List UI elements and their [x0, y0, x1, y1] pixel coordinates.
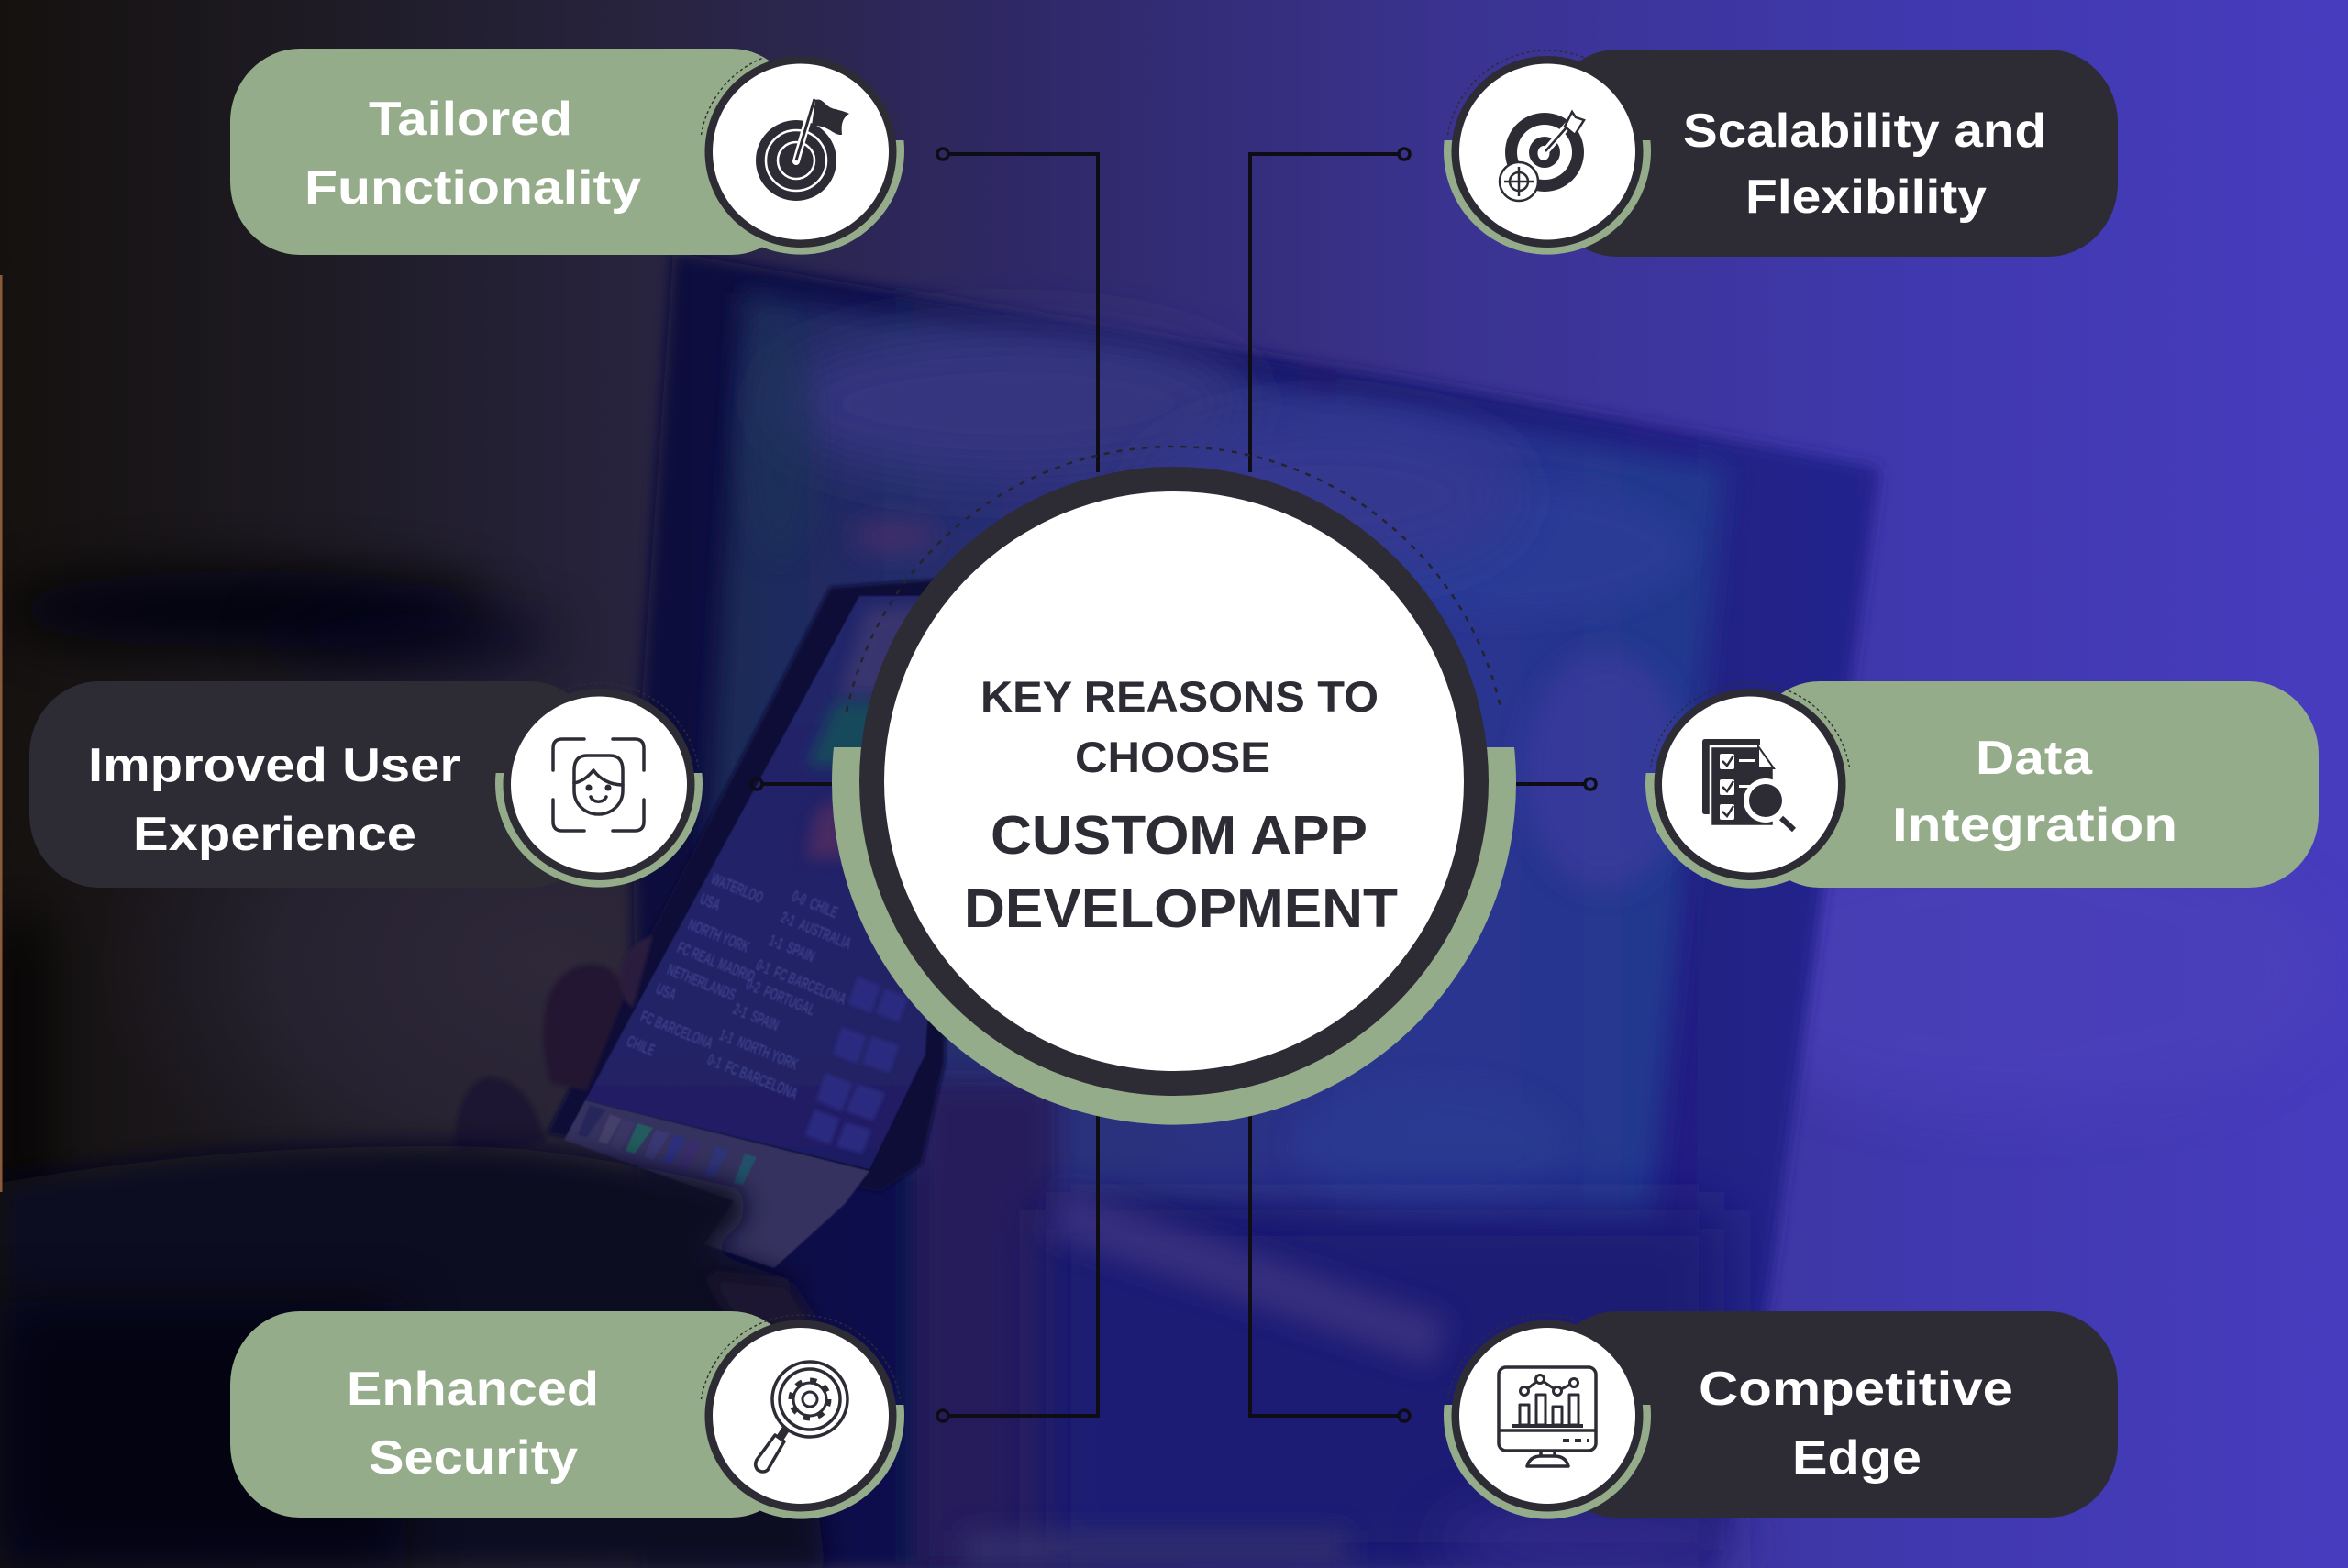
phone in hand: USA [653, 980, 679, 1005]
hub title: KEY REASONS TO [980, 672, 1379, 721]
label: Integration [1892, 799, 2177, 852]
panel: Data Integration [1645, 681, 2319, 889]
label [1699, 1363, 2013, 1485]
green half ring [1645, 773, 1855, 889]
green half ring [697, 140, 904, 255]
pill [1750, 681, 2319, 888]
phone in hand: NORTH YORK [685, 916, 752, 957]
dashed arc [499, 683, 699, 767]
phone in hand: 0-1 FC BARCELONA [753, 956, 848, 1010]
green half ring [1444, 140, 1651, 255]
icon badge [1451, 56, 1644, 248]
hub title: DEVELOPMENT [964, 878, 1398, 939]
label: Edge [1792, 1431, 1922, 1485]
panel: Scalability and Flexibility [1444, 50, 2118, 257]
icon badge [1451, 1320, 1644, 1511]
label: Functionality [305, 161, 641, 215]
label: Tailored [369, 93, 572, 146]
green half ring [1444, 1405, 1651, 1519]
phone in hand: WATERLOO [708, 870, 766, 908]
phone in hand: 0-0 CHILE [789, 888, 840, 922]
icon: magnifier with gear [756, 1362, 847, 1472]
hub dashed arc [847, 447, 1501, 712]
label [347, 1363, 599, 1485]
phone in hand [0, 578, 958, 1568]
phone in hand: NETHERLANDS [664, 961, 738, 1005]
dashed arc [1447, 50, 1647, 135]
icon: monitor with chart [1499, 1367, 1596, 1466]
connector lines [751, 149, 1596, 1421]
label: Scalability and [1683, 105, 2046, 158]
label [1892, 732, 2177, 852]
dashed arc [701, 1315, 901, 1399]
icon badge [1655, 689, 1845, 880]
hub title: CHOOSE [1075, 733, 1270, 781]
hub title [964, 672, 1398, 939]
hub white disc [884, 491, 1464, 1071]
hub title: CUSTOM APP [991, 805, 1368, 866]
label: Experience [133, 808, 416, 861]
icon badge [503, 689, 695, 880]
dashed arc [1651, 683, 1849, 767]
icon badge [704, 1320, 897, 1511]
pill [1547, 50, 2118, 257]
label: Flexibility [1745, 171, 1987, 224]
pill [230, 1311, 801, 1518]
phone in hand: 0-1 FC BARCELONA [704, 1051, 800, 1104]
hub dark ring [859, 467, 1489, 1096]
label [1683, 105, 2046, 224]
pill [29, 681, 599, 888]
label: Enhanced [347, 1363, 599, 1416]
icon: target with arrow and crosshair [1500, 112, 1584, 201]
hub green half ring [832, 747, 1516, 1125]
label: Security [369, 1431, 578, 1485]
label [88, 739, 460, 861]
panel: central hub [832, 447, 1516, 1125]
phone in hand: FC REAL MADRID [674, 939, 758, 987]
green half ring [495, 773, 703, 888]
icon: target with flag [756, 99, 849, 201]
icon badge [704, 56, 897, 248]
panel: Tailored Functionality [230, 49, 904, 255]
pill [1547, 1311, 2118, 1518]
label: Data [1976, 732, 2093, 785]
panel: Enhanced Security [230, 1311, 904, 1519]
phone in hand: 1-1 NORTH YORK [716, 1026, 801, 1075]
phone in hand: CHILE [624, 1032, 658, 1060]
label: Competitive [1699, 1363, 2013, 1416]
dashed arc [1447, 1315, 1647, 1399]
phone in hand: 0-2 PORTUGAL [743, 976, 817, 1020]
phone in hand: USA [697, 890, 723, 915]
phone in hand: 2-1 SPAIN [730, 1000, 781, 1035]
panel: Competitive Edge [1444, 1311, 2118, 1519]
icon: checklist with magnifier [1702, 739, 1794, 830]
phone in hand: FC BARCELONA [637, 1008, 715, 1054]
green half ring [697, 1405, 904, 1519]
dashed arc [701, 50, 901, 135]
icon: face scan [553, 739, 644, 831]
panel: Improved User Experience [29, 681, 703, 888]
pill [230, 49, 801, 255]
label [305, 93, 641, 215]
label: Improved User [88, 739, 460, 792]
phone in hand: 1-1 SPAIN [766, 932, 817, 966]
phone in hand: 2-1 AUSTRALIA [778, 909, 854, 954]
